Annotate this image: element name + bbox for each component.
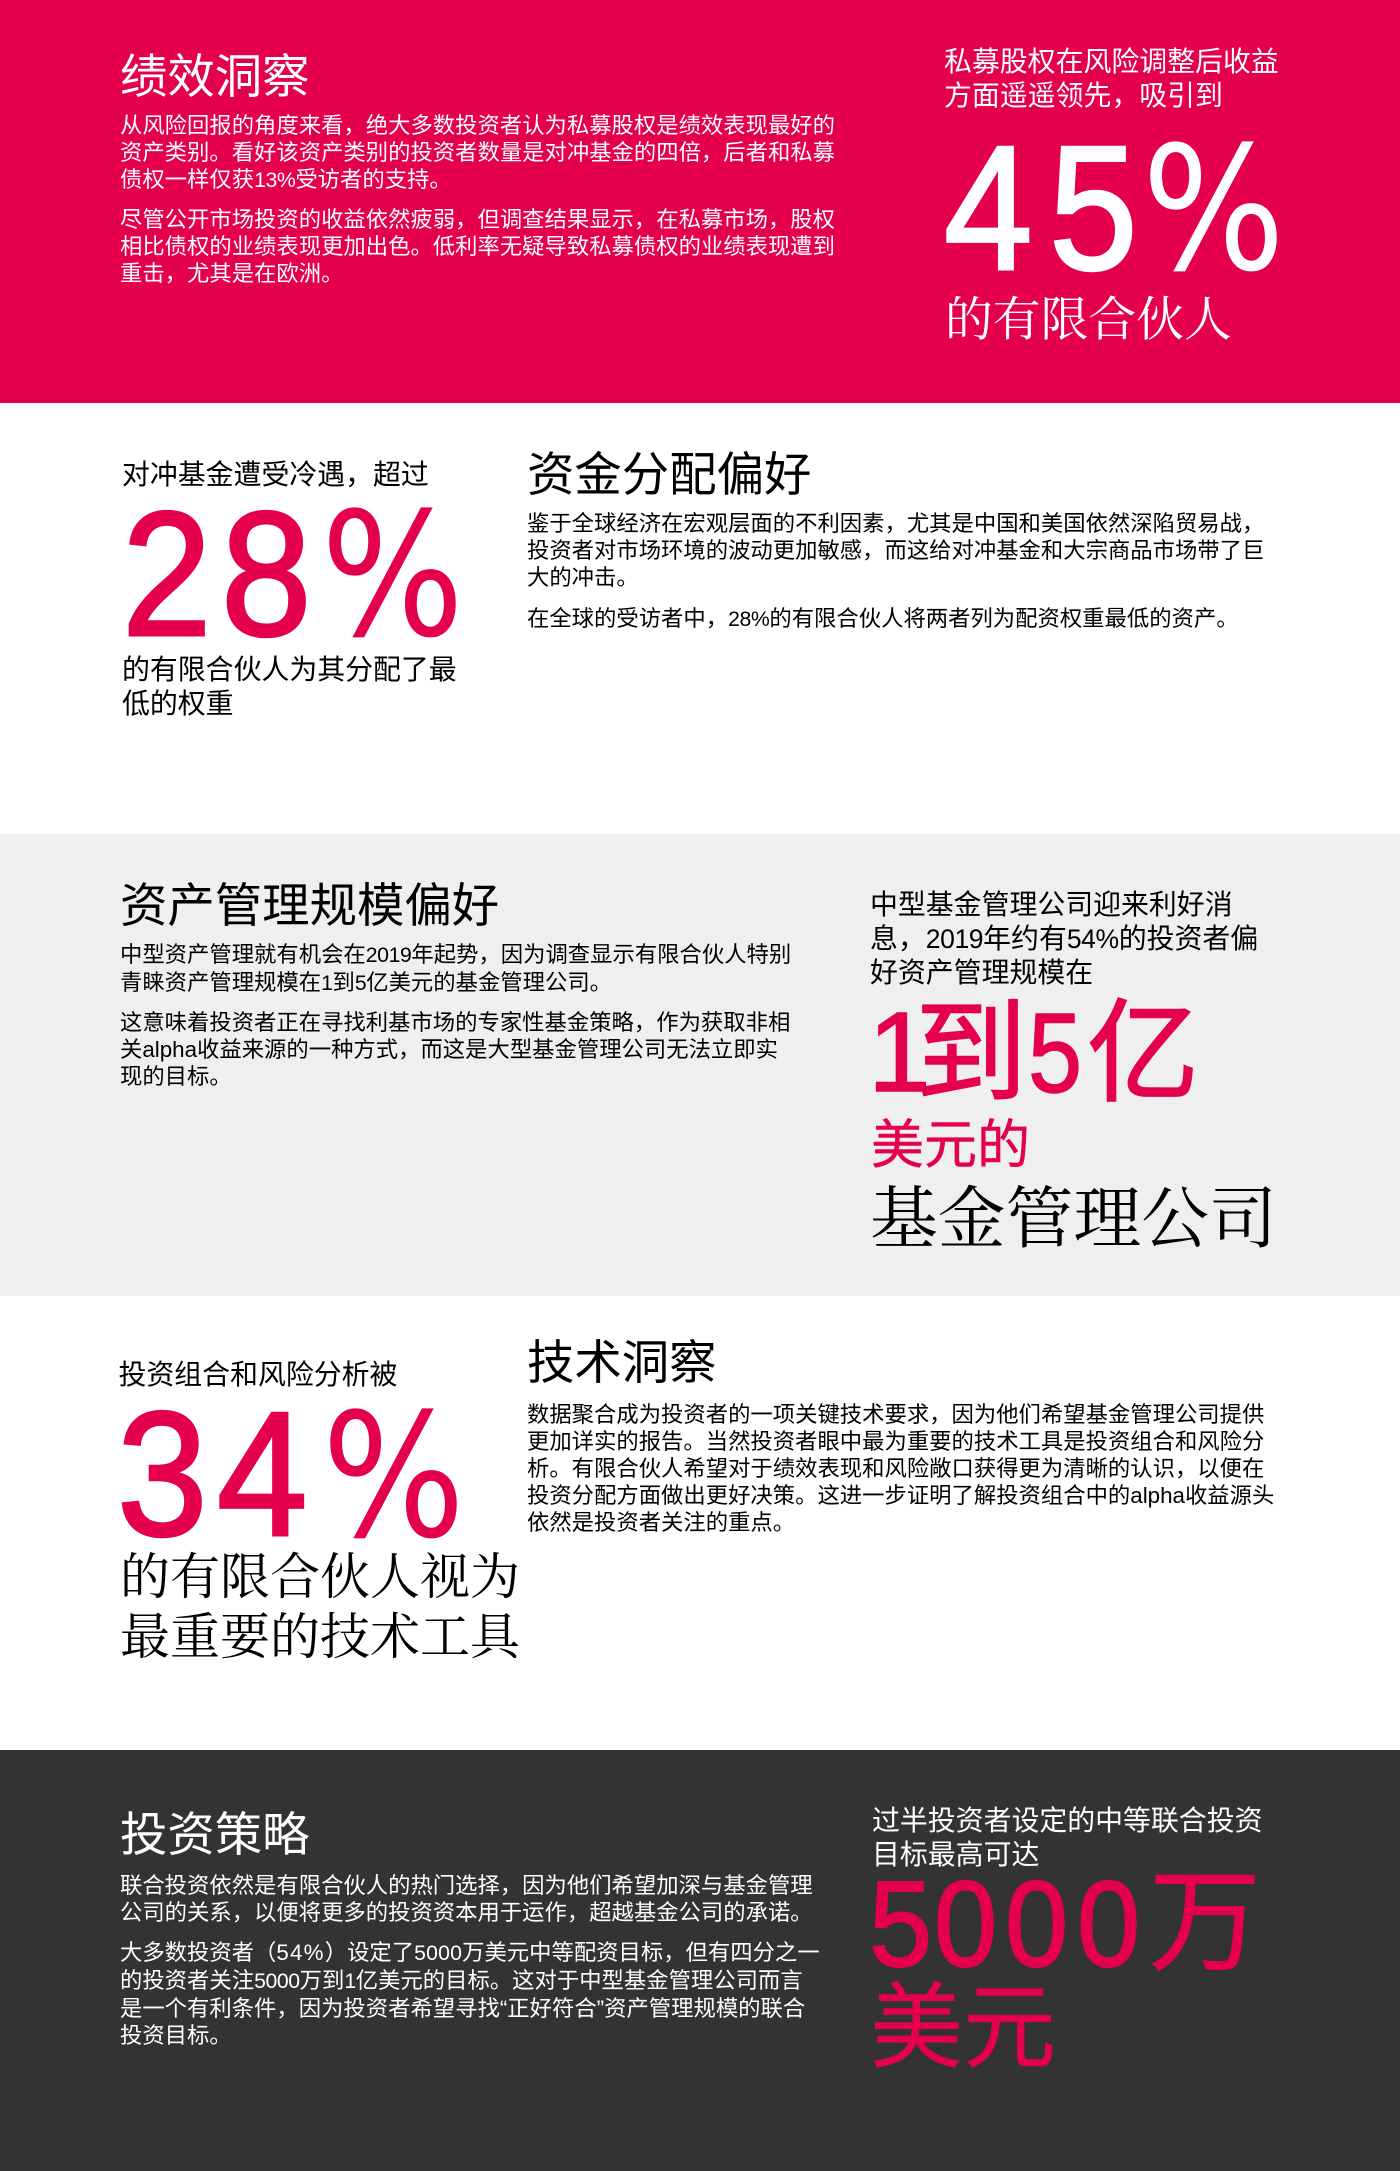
text block: performance paragraph 1: 资产类别。看好该资产类别的投资者数量是对冲基金的四倍，后者和私募 — [120, 140, 835, 164]
callout caption: lowest weighting: 低的权重 — [122, 688, 234, 719]
callout label: median co-investment: 过半投资者设定的中等联合投资 — [872, 1805, 1262, 1836]
text block: allocation paragraph 1 — [527, 510, 1264, 590]
big number: 50 million — [869, 1856, 1261, 1992]
big number: 50 million: 0 — [1077, 1856, 1140, 1992]
big number: 1 to 5 hundred million: 1 — [868, 989, 931, 1115]
callout label: mid-sized managers — [870, 889, 1258, 988]
callout label: median co-investment: 目标最高可达 — [872, 1838, 1039, 1870]
text block: strategy paragraph 1: 公司的关系，以便将更多的投资资本用于运作，超越基金公司的承诺。 — [120, 1900, 813, 1924]
big number: 34% — [117, 1375, 465, 1577]
heading: investment strategy: 投资策略 — [120, 1808, 310, 1862]
text block: performance paragraph 1: 债权一样仅获13%受访者的支持。 — [120, 166, 452, 192]
heading: performance insights: 绩效洞察 — [120, 50, 310, 104]
text block: technology paragraph: 数据聚合成为投资者的一项关键技术要求，因为他们希望基金管理公司提供 — [527, 1402, 1264, 1426]
text block: AUM paragraph 2 — [120, 1010, 790, 1088]
callout label: median co-investment — [872, 1805, 1262, 1870]
callout caption: most important tool: 的有限合伙人视为 — [120, 1549, 520, 1605]
big number: 1 to 5 hundred million — [868, 989, 1199, 1116]
callout label: private equity: 方面遥遥领先，吸引到 — [944, 80, 1223, 110]
callout caption: most important tool: 最重要的技术工具 — [120, 1609, 520, 1665]
text block: allocation paragraph 1: 鉴于全球经济在宏观层面的不利因素，尤其是中国和美国依然深陷贸易战， — [527, 510, 1264, 536]
heading: technology insights: 技术洞察 — [527, 1337, 717, 1390]
big number: 28% — [122, 475, 464, 676]
text block: performance paragraph 2: 尽管公开市场投资的收益依然疲弱，但调查结果显示，在私募市场，股权 — [120, 206, 835, 232]
callout label: portfolio and risk analytics: 投资组合和风险分析被 — [118, 1358, 397, 1390]
big number: 45%: 4 — [944, 109, 1033, 307]
text block: technology paragraph: 析。有限合伙人希望对于绩效表现和风险敞口获得更为清晰的认识，以便在 — [527, 1456, 1264, 1480]
callout label: private equity — [944, 46, 1279, 110]
text block: performance paragraph 2: 重击，尤其是在欧洲。 — [120, 260, 343, 286]
big number: 28%: 2 — [122, 475, 212, 673]
big number: 34%: 4 — [217, 1375, 308, 1573]
callout caption: most important tool — [120, 1549, 520, 1665]
text block: performance paragraph 1: 从风险回报的角度来看，绝大多数投资者认为私募股权是绩效表现最好的 — [120, 112, 835, 138]
callout caption: lowest weighting — [122, 654, 457, 719]
text block: strategy paragraph 2 — [120, 1940, 820, 2048]
callout sub-label: US dollars: 美元的 — [871, 1116, 1030, 1175]
big number: 1 to 5 hundred million: 到 — [915, 991, 1027, 1116]
big number: 34%: % — [322, 1376, 465, 1577]
text block: technology paragraph: 投资分配方面做出更好决策。这进一步证明了解投资组合中的alpha收益源头 — [527, 1482, 1274, 1508]
big number: 1 to 5 hundred million: 亿 — [1087, 991, 1199, 1116]
callout caption: limited partners: 的有限合伙人 — [945, 294, 1232, 347]
text block: strategy paragraph 1: 联合投资依然是有限合伙人的热门选择，因为他们希望加深与基金管理 — [120, 1872, 813, 1898]
callout label: mid-sized managers: 好资产管理规模在 — [870, 957, 1093, 988]
big number: 28%: % — [321, 475, 464, 676]
text block: allocation paragraph 1: 大的冲击。 — [527, 564, 639, 590]
callout sub-label: US dollars: 美元 — [870, 1976, 1056, 2080]
text block: technology paragraph: 更加详实的报告。当然投资者眼中最为重要的技术工具是投资组合和风险分 — [527, 1428, 1264, 1454]
panel: performance insights — [0, 0, 1400, 403]
big number: 28%: 8 — [221, 475, 312, 673]
text block: strategy paragraph 2: 大多数投资者（54%）设定了5000万美元中等配资目标，但有四分之一 — [120, 1940, 820, 1965]
big number: 50 million: 0 — [1005, 1856, 1068, 1992]
big number: 45%: 5 — [1049, 109, 1138, 307]
big number: 45% — [944, 109, 1285, 310]
panel: AUM preferences — [0, 834, 1400, 1296]
text block: performance paragraph 2: 相比债权的业绩表现更加出色。低利率无疑导致私募债权的业绩表现遭到 — [120, 234, 835, 258]
text block: AUM paragraph 2: 关alpha收益来源的一种方式，而这是大型基金管理公司无法立即实 — [120, 1036, 778, 1062]
text block: performance paragraph 1 — [120, 112, 835, 192]
callout label: mid-sized managers: 息，2019年约有54%的投资者偏 — [870, 922, 1258, 954]
callout label: private equity: 私募股权在风险调整后收益 — [944, 46, 1279, 77]
heading: allocation preferences: 资金分配偏好 — [527, 449, 811, 502]
panel: technology insights — [0, 1296, 1400, 1750]
text block: AUM paragraph 2: 现的目标。 — [120, 1064, 232, 1088]
big number: 1 to 5 hundred million: 5 — [1028, 990, 1082, 1116]
text block: performance paragraph 2 — [120, 206, 835, 286]
text block: strategy paragraph 1 — [120, 1872, 813, 1924]
callout caption: fund managers: 基金管理公司 — [870, 1182, 1277, 1256]
text block: allocation paragraph 1: 投资者对市场环境的波动更加敏感，而这给对冲基金和大宗商品市场带了巨 — [527, 538, 1264, 562]
big number: 34%: 3 — [117, 1375, 208, 1573]
text block: strategy paragraph 2: 投资目标。 — [120, 2023, 232, 2048]
text block: technology paragraph — [527, 1402, 1274, 1534]
text block: AUM paragraph 1: 青睐资产管理规模在1到5亿美元的基金管理公司。 — [120, 970, 612, 994]
text block: allocation paragraph 2: 在全球的受访者中，28%的有限合伙人将两者列为配资权重最低的资产。 — [527, 606, 1239, 630]
text block: AUM paragraph 1 — [120, 942, 791, 994]
callout label: hedge funds: 对冲基金遭受冷遇，超过 — [122, 458, 429, 490]
big number: 50 million: 万 — [1149, 1860, 1261, 1985]
panel: allocation preferences — [0, 403, 1400, 834]
text block: AUM paragraph 2: 这意味着投资者正在寻找利基市场的专家性基金策略，作为获取非相 — [120, 1010, 790, 1034]
panel: investment strategy — [0, 1750, 1400, 2171]
text block: strategy paragraph 2: 的投资者关注5000万到1亿美元的目标。这对于中型基金管理公司而言 — [120, 1968, 803, 1993]
callout caption: lowest weighting: 的有限合伙人为其分配了最 — [122, 654, 457, 685]
callout label: mid-sized managers: 中型基金管理公司迎来利好消 — [870, 889, 1233, 920]
text block: AUM paragraph 1: 中型资产管理就有机会在2019年起势，因为调查显示有限合伙人特别 — [120, 942, 791, 966]
text block: strategy paragraph 2: 是一个有利条件，因为投资者希望寻找“正好符合”资产管理规模的联合 — [120, 1996, 805, 2021]
text block: technology paragraph: 依然是投资者关注的重点。 — [527, 1510, 795, 1534]
big number: 50 million: 5 — [869, 1856, 932, 1992]
big number: 45%: % — [1142, 109, 1285, 310]
big number: 50 million: 0 — [934, 1856, 997, 1992]
heading: AUM preferences: 资产管理规模偏好 — [120, 880, 499, 932]
